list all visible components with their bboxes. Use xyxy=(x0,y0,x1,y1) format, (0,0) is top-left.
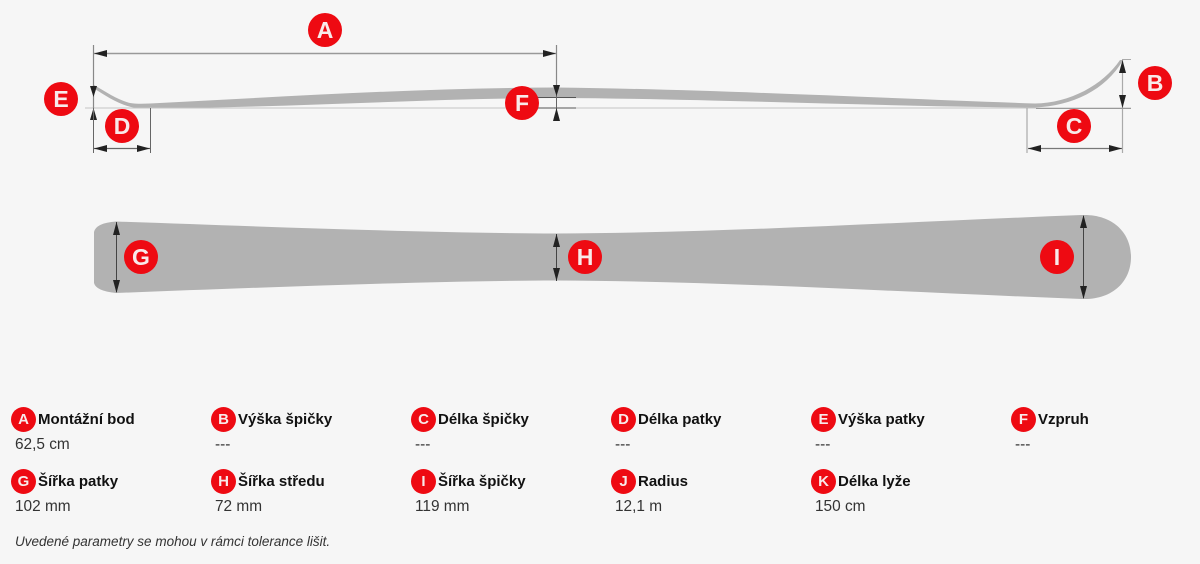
legend item G xyxy=(11,469,118,515)
legend item J: 12,1 m xyxy=(615,498,662,515)
marker G xyxy=(124,240,158,274)
marker B xyxy=(1138,66,1172,100)
marker B: B xyxy=(1147,70,1163,96)
legend item C: Délka špičky xyxy=(438,411,529,428)
legend item G: G xyxy=(18,473,29,490)
legend item K xyxy=(811,469,911,515)
legend item D: --- xyxy=(615,436,630,453)
legend item K: Délka lyže xyxy=(838,473,911,490)
marker A xyxy=(308,13,342,47)
marker I xyxy=(1040,240,1074,274)
marker F xyxy=(505,86,539,120)
legend item J xyxy=(611,469,688,515)
dimension F arrow xyxy=(553,85,560,121)
dimension G arrow xyxy=(113,222,120,293)
legend item B: B xyxy=(218,411,229,428)
legend item K: K xyxy=(818,473,829,490)
legend item C: C xyxy=(418,411,429,428)
legend item I xyxy=(411,469,526,515)
legend item F: --- xyxy=(1015,436,1030,453)
marker H xyxy=(568,240,602,274)
marker H: H xyxy=(577,244,593,270)
legend item D: Délka patky xyxy=(638,411,721,428)
marker D: D xyxy=(114,113,130,139)
legend item C: --- xyxy=(415,436,430,453)
legend item I: 119 mm xyxy=(415,498,469,515)
legend item H xyxy=(211,469,325,515)
marker F: F xyxy=(515,90,529,116)
legend item C xyxy=(411,407,529,453)
dimension I arrow xyxy=(1080,215,1087,299)
tolerance note: Uvedené parametry se mohou v rámci tolerance lišit. xyxy=(15,534,330,549)
marker G: G xyxy=(132,244,150,270)
top view of ski xyxy=(94,215,1131,299)
dimension B arrow xyxy=(1036,60,1131,153)
marker E xyxy=(44,82,78,116)
legend item F xyxy=(1011,407,1089,453)
legend item E xyxy=(811,407,925,453)
legend item H: H xyxy=(218,473,229,490)
legend item A: A xyxy=(18,411,29,428)
marker C: C xyxy=(1066,113,1082,139)
marker I: I xyxy=(1054,244,1060,270)
legend item E: Výška patky xyxy=(838,411,925,428)
legend item D xyxy=(611,407,722,453)
legend item H: Šířka středu xyxy=(238,473,325,490)
legend item J: Radius xyxy=(638,473,688,490)
legend item E: E xyxy=(818,411,828,428)
dimension A arrow xyxy=(94,45,556,108)
marker E: E xyxy=(53,86,69,112)
marker D xyxy=(105,109,139,143)
legend item A xyxy=(11,407,135,453)
legend item K: 150 cm xyxy=(815,498,865,515)
legend item A: Montážní bod xyxy=(38,411,135,428)
dimension C arrow xyxy=(1027,108,1122,153)
legend item F: F xyxy=(1019,411,1028,428)
legend item D: D xyxy=(618,411,629,428)
legend item B: Výška špičky xyxy=(238,411,332,428)
legend item F: Vzpruh xyxy=(1038,411,1089,428)
legend item G: 102 mm xyxy=(15,498,71,515)
legend item I: I xyxy=(421,473,426,490)
marker C xyxy=(1057,109,1091,143)
dimension H arrow xyxy=(553,234,560,281)
legend item A: 62,5 cm xyxy=(15,436,70,453)
legend item G: Šířka patky xyxy=(38,473,118,490)
legend item J: J xyxy=(619,473,628,490)
side profile of ski xyxy=(85,60,1131,108)
legend item B: --- xyxy=(215,436,230,453)
dimension D arrow xyxy=(94,108,150,153)
legend item E: --- xyxy=(815,436,830,453)
marker A: A xyxy=(317,17,333,43)
legend item B xyxy=(211,407,332,453)
dimension E arrow xyxy=(90,86,97,120)
legend item H: 72 mm xyxy=(215,498,262,515)
legend item I: Šířka špičky xyxy=(438,473,526,490)
